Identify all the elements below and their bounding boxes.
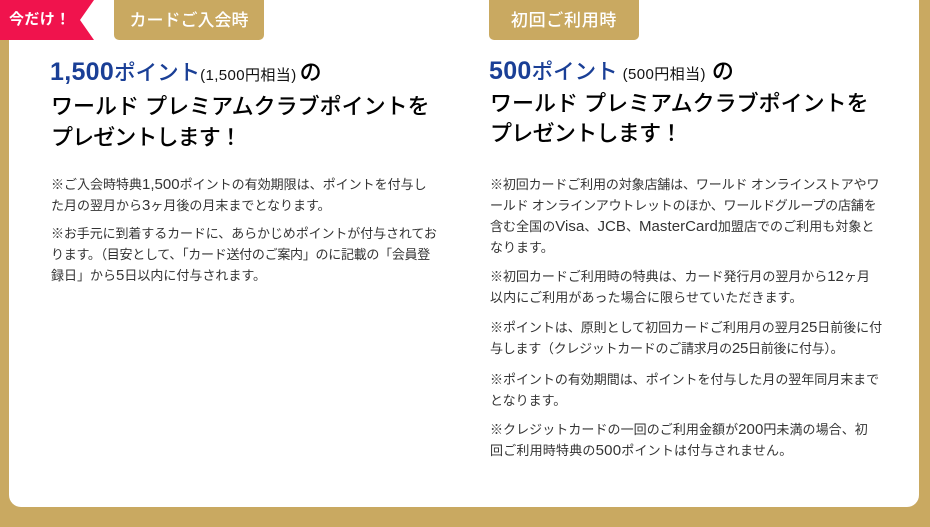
text block: left notes: た月の翌月から3ヶ月後の月末までとなります。 (51, 197, 331, 214)
text block: left notes: ります。（目安として、「カード送付のご案内」のに記載の「会員登 (51, 247, 430, 262)
heading: right column: プレゼントします！ (490, 121, 682, 146)
tab: on first use: 初回ご利用時 (511, 11, 617, 30)
text block: right notes: 回ご利用時特典の500ポイントは付与されません。 (490, 442, 792, 459)
text block: left notes: ※お手元に到着するカードに、あらかじめポイントが付与されてお (51, 226, 437, 241)
text block: right notes: ※初回カードご利用時の特典は、カード発行月の翌月から12ヶ月 (490, 268, 870, 285)
text block: right notes: 含む全国のVisa、JCB、MasterCard加盟店でのご利用も対象と (490, 218, 874, 235)
text block: left notes: 録日」から5日以内に付与されます。 (51, 267, 266, 284)
heading: right column: ワールド プレミアムクラブポイントを (490, 91, 869, 116)
heading: right column: 500ポイント (500円相当) の (489, 57, 734, 85)
tab: on card enrollment: カードご入会時 (130, 11, 248, 30)
badge: limited time (0, 0, 94, 40)
heading: right column (489, 57, 869, 146)
heading: left column (50, 58, 430, 150)
text block: right notes: 与します（クレジットカードのご請求月の25日前後に付与）。 (490, 340, 843, 357)
text block: right notes: ※クレジットカードの一回のご利用金額が200円未満の場合、初 (490, 421, 868, 438)
tab: on card enrollment (114, 0, 264, 40)
text block: right notes: 以内にご利用があった場合に限らせていただきます。 (490, 290, 803, 305)
text block: right notes: ールド オンラインアウトレットのほか、ワールドグループの店舗を (490, 198, 876, 213)
text block: right notes (490, 177, 882, 459)
tab: on first use (489, 0, 639, 40)
heading: left column: 1,500ポイント(1,500円相当)の (50, 58, 322, 86)
text block: left notes: ※ご入会時特典1,500ポイントの有効期限は、ポイントを付与し (51, 176, 427, 193)
badge: limited time: 今だけ！ (9, 11, 71, 28)
heading: left column: プレゼントします！ (51, 125, 241, 150)
text block: left notes (51, 176, 437, 284)
text block: right notes: なります。 (490, 240, 554, 255)
text block: right notes: となります。 (490, 393, 566, 408)
text block: right notes: ※ポイントの有効期間は、ポイントを付与した月の翌年同月末まで (490, 372, 879, 387)
text block: right notes: ※ポイントは、原則として初回カードご利用月の翌月25日前後に付 (490, 319, 882, 336)
heading: left column: ワールド プレミアムクラブポイントを (51, 94, 430, 119)
text block: right notes: ※初回カードご利用の対象店舗は、ワールド オンラインストアやワ (490, 177, 879, 192)
